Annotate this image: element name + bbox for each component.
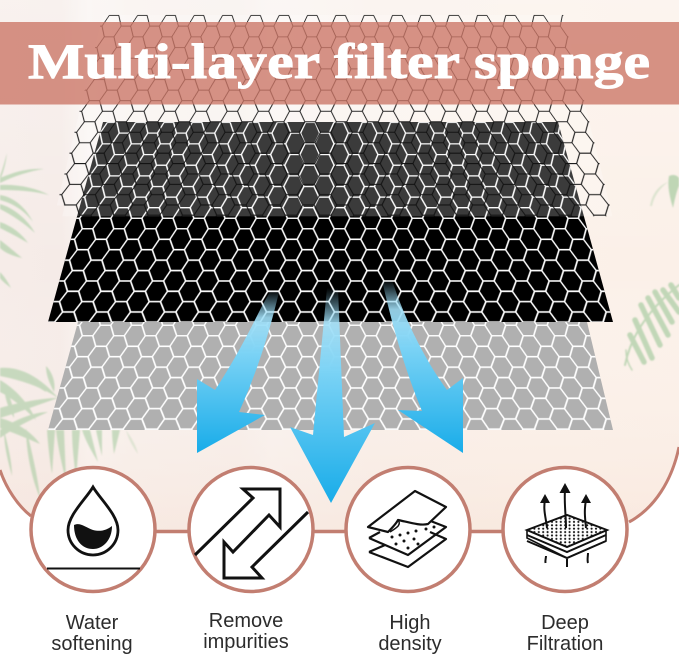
label: remove impurities	[203, 610, 289, 653]
layer: black sponge	[48, 122, 613, 322]
label: water softening	[51, 612, 133, 655]
label: high density: density	[378, 633, 442, 655]
label: water softening: softening	[51, 633, 133, 655]
arrow: centre	[290, 288, 375, 503]
label: remove impurities: Remove	[209, 610, 283, 632]
plant: upper right sprig	[650, 175, 679, 208]
label: water softening: Water	[66, 612, 118, 634]
icon: water drop	[47, 487, 140, 568]
plant: lower right fern	[625, 285, 679, 370]
white area outside frame	[0, 447, 679, 657]
plant: lower left fern	[0, 366, 138, 498]
label: high density: High	[389, 612, 431, 634]
arrow: right	[382, 280, 463, 453]
label: deep filtration: Deep	[541, 612, 589, 634]
icon: opposing arrows	[195, 489, 308, 578]
label: remove impurities: impurities	[203, 631, 289, 653]
icon: layered mesh with rising arrows	[527, 483, 607, 567]
frame arcs and connectors	[0, 447, 679, 532]
title: Multi-layer filter sponge	[28, 33, 650, 89]
arrow: left	[197, 290, 279, 453]
layer: grey sponge	[48, 322, 613, 430]
layer: outlined translucent hexagon sponge	[60, 14, 610, 216]
label: deep filtration: Filtration	[527, 633, 603, 655]
icon: stacked sheets	[368, 491, 446, 567]
label: high density	[378, 612, 442, 655]
label: deep filtration	[527, 612, 603, 655]
plant: upper left palm	[0, 153, 49, 288]
